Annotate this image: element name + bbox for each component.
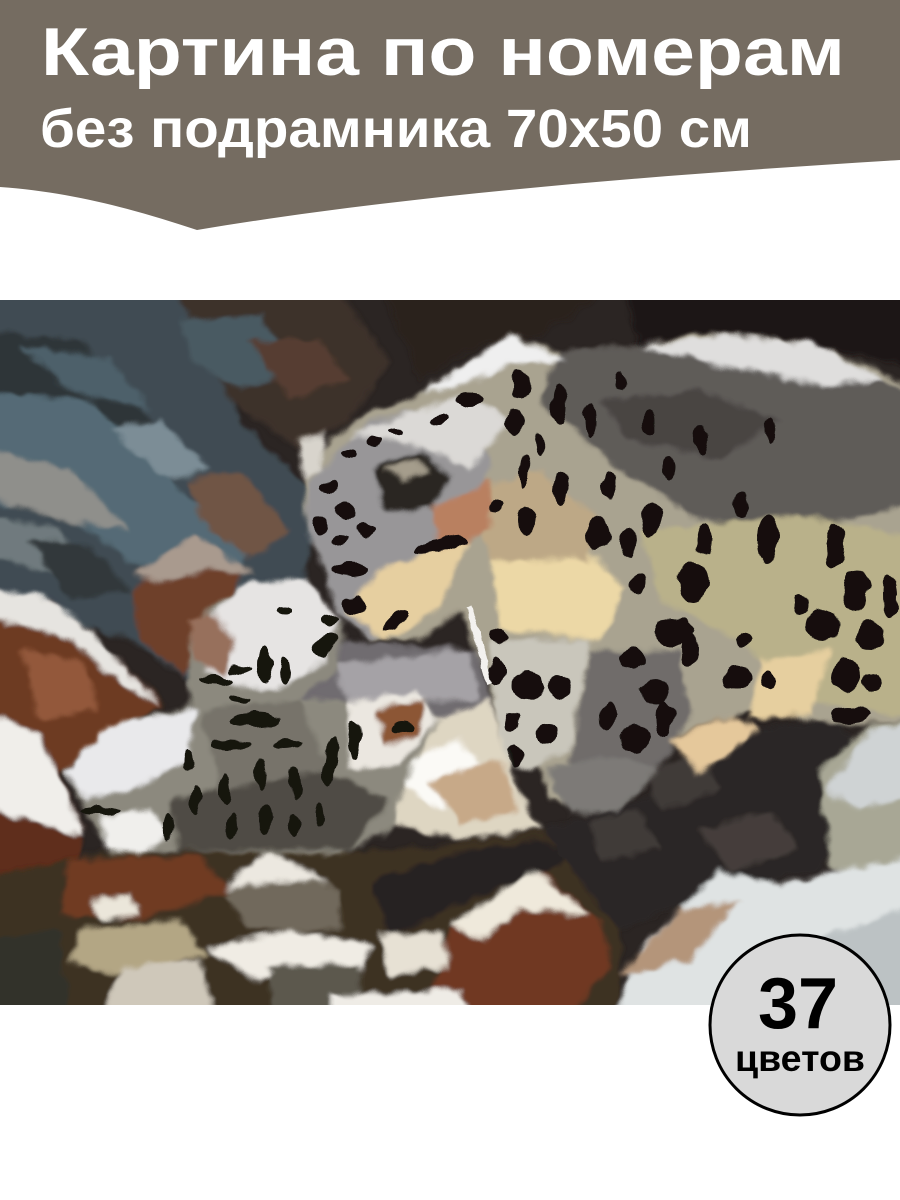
adult snow leopard xyxy=(297,332,900,815)
body xyxy=(305,332,900,810)
colours label: цветов xyxy=(735,1038,865,1079)
painting: snow leopard with cub xyxy=(0,280,900,1030)
badge: 37 colours xyxy=(710,935,890,1115)
chest xyxy=(490,550,625,640)
header banner xyxy=(0,0,900,230)
left red rocks xyxy=(0,587,164,876)
subtitle: без подрамника 70х50 см xyxy=(40,99,752,159)
background rocks xyxy=(0,300,900,720)
snow patch under the mother xyxy=(350,700,760,840)
title: Картина по номерам xyxy=(41,14,845,90)
number of colours: 37 xyxy=(758,964,838,1044)
face xyxy=(305,400,490,640)
flank xyxy=(640,515,900,720)
leopard spots xyxy=(312,370,897,766)
foreground rocks xyxy=(0,715,900,1030)
whisker strokes xyxy=(466,606,492,685)
snow leopard cub xyxy=(65,578,440,855)
cub stripes xyxy=(80,606,414,839)
back shading xyxy=(540,340,900,530)
